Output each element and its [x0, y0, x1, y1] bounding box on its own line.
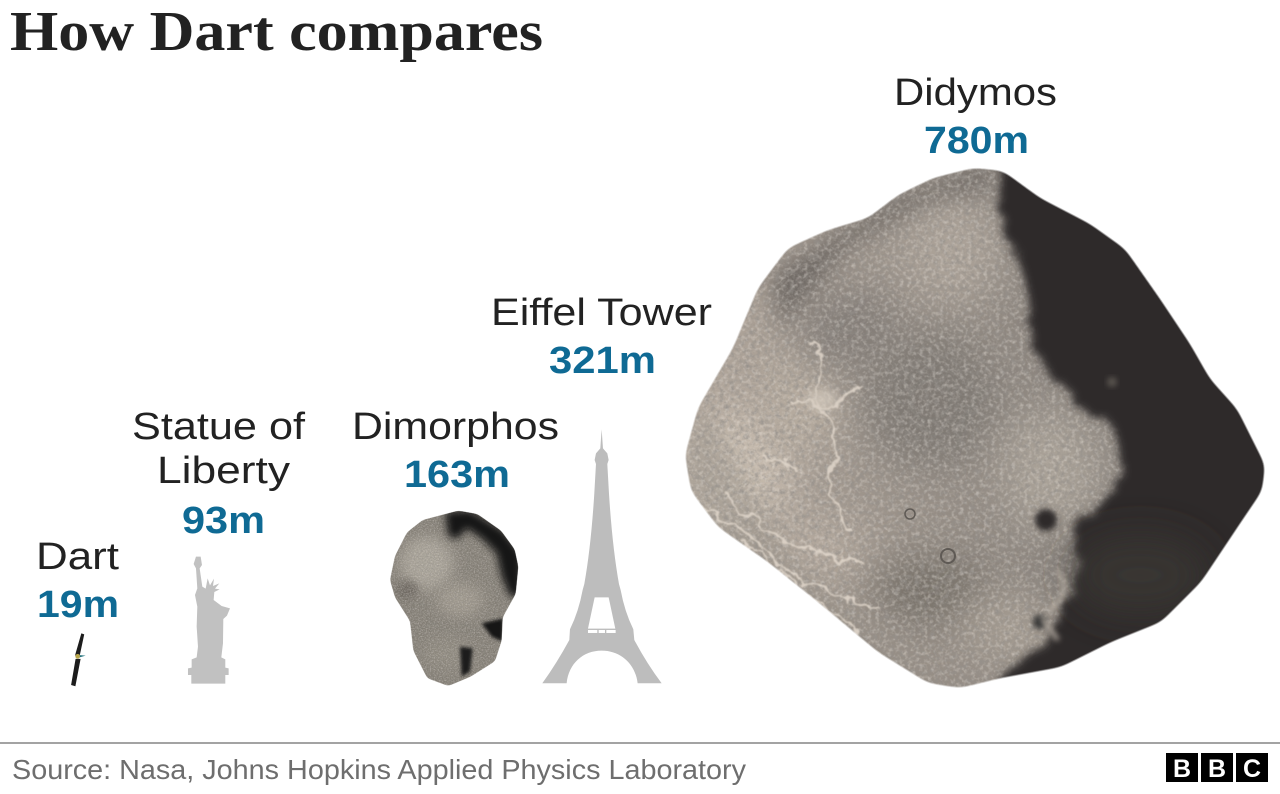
- label: Statue of Liberty: 93m: [182, 500, 265, 542]
- icon: Statue of Liberty silhouette: [188, 557, 230, 684]
- label: Didymos: 780m: [924, 120, 1029, 162]
- label: Dimorphos: [352, 406, 559, 496]
- label: Eiffel Tower: [491, 292, 712, 382]
- label: Dart: 19m: [37, 584, 119, 626]
- label: Statue of Liberty: Liberty: [157, 450, 290, 492]
- label: Dart: [36, 536, 120, 626]
- label: Dimorphos: Dimorphos: [352, 406, 559, 448]
- source note: Source: Nasa, Johns Hopkins Applied Physics Laboratory: [12, 754, 746, 785]
- label: Didymos: [894, 72, 1057, 162]
- footer rule: [0, 742, 1280, 744]
- label: Didymos: Didymos: [894, 72, 1057, 114]
- title: How Dart compares: [10, 1, 543, 63]
- icon: Didymos asteroid: [685, 168, 1265, 688]
- label: Dimorphos: 163m: [404, 454, 510, 496]
- label: Dart: Dart: [36, 536, 120, 578]
- BBC logo: C: [1243, 755, 1261, 783]
- label: Eiffel Tower: Eiffel Tower: [491, 292, 712, 334]
- label: Eiffel Tower: 321m: [549, 340, 656, 382]
- icon: Dimorphos asteroid: [390, 510, 518, 686]
- icon: Dart spacecraft: [72, 634, 86, 686]
- label: Statue of Liberty: Statue of: [132, 406, 305, 448]
- label: Statue of Liberty: [132, 406, 305, 542]
- icon: Eiffel Tower silhouette: [542, 429, 662, 683]
- BBC logo: B: [1173, 755, 1191, 783]
- BBC logo: [1166, 753, 1268, 783]
- BBC logo: B: [1208, 755, 1226, 783]
